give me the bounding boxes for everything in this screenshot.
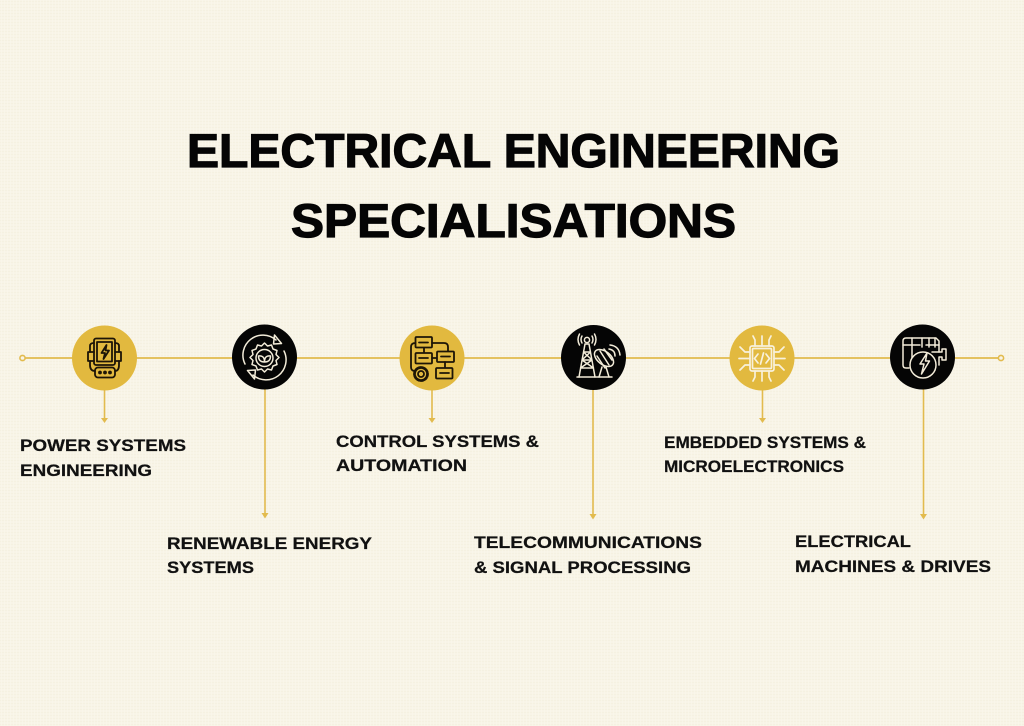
title: ELECTRICAL ENGINEERING [187, 124, 840, 177]
label: embedded systems and microelectronics: MICROELECTRONICS [664, 457, 844, 476]
icon: telecom tower and dish [561, 325, 626, 390]
title [187, 124, 840, 247]
label: power systems engineering [20, 436, 186, 480]
title: SPECIALISATIONS [291, 194, 736, 247]
label: power systems engineering: ENGINEERING [20, 461, 152, 480]
connector arrow: renewable energy [262, 388, 268, 518]
icon: control flowchart [400, 326, 464, 390]
label: control systems and automation [336, 432, 539, 475]
connector arrow: power systems [101, 388, 108, 423]
label: embedded systems and microelectronics [664, 433, 866, 476]
connector arrow: embedded systems [759, 388, 766, 423]
icon: electrical machine [890, 324, 955, 390]
label: telecommunications and signal processing [474, 533, 702, 577]
label: embedded systems and microelectronics: EMBEDDED SYSTEMS & [664, 433, 866, 452]
label: control systems and automation: CONTROL SYSTEMS & [336, 432, 539, 451]
label: electrical machines and drives: ELECTRICAL [795, 532, 911, 551]
label: telecommunications and signal processing: & SIGNAL PROCESSING [474, 558, 691, 577]
icon: power panel [72, 326, 137, 390]
icon: renewable gear [232, 324, 297, 390]
label: electrical machines and drives: MACHINES & DRIVES [795, 557, 991, 576]
label: telecommunications and signal processing: TELECOMMUNICATIONS [474, 533, 702, 552]
connector arrow: control systems [428, 388, 436, 423]
label: control systems and automation: AUTOMATION [336, 456, 467, 475]
connector arrow: telecommunications [590, 388, 596, 520]
label: renewable energy systems [167, 534, 373, 577]
timeline line [20, 355, 1004, 361]
label: renewable energy systems: RENEWABLE ENERGY [167, 534, 373, 553]
label: electrical machines and drives [795, 532, 991, 576]
connector arrow: electrical machines [920, 388, 927, 520]
icon: embedded chip [730, 326, 794, 390]
label: renewable energy systems: SYSTEMS [167, 558, 254, 577]
label: power systems engineering: POWER SYSTEMS [20, 436, 186, 455]
